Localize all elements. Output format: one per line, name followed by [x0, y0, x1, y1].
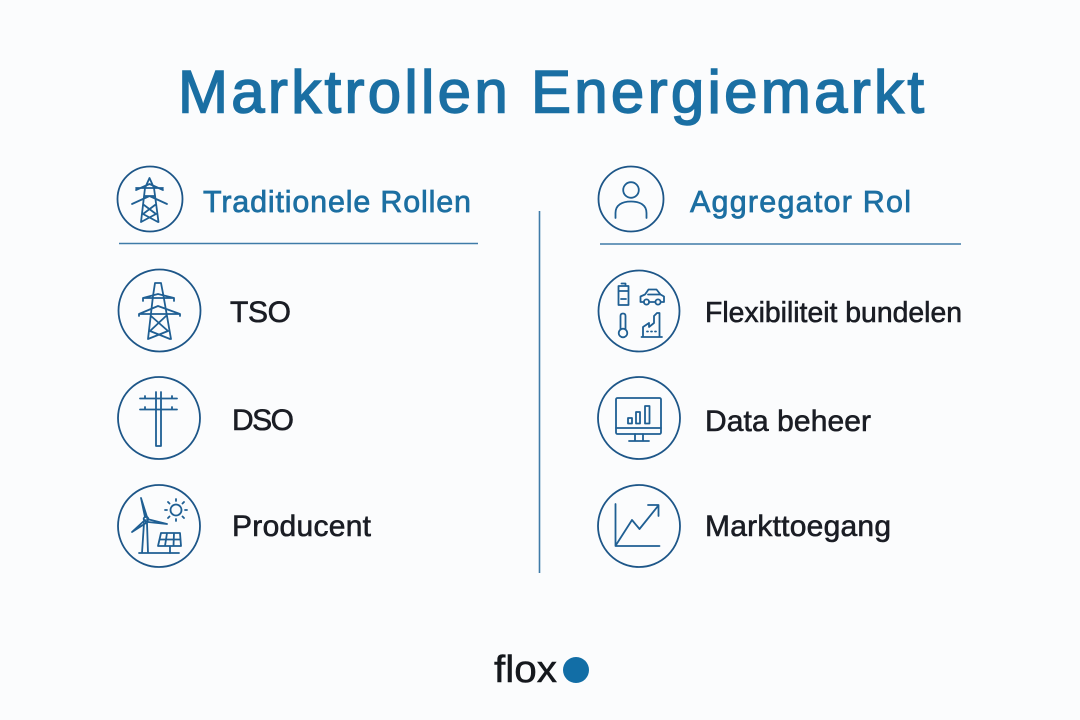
label: TSO [230, 296, 291, 329]
panel: traditionele rollen [118, 166, 478, 567]
icon: wind turbine and solar panel [118, 485, 200, 567]
label: Flexibiliteit bundelen [705, 297, 962, 329]
logo: flox: flox [494, 649, 557, 691]
label: Data beheer [705, 405, 871, 438]
label: DSO [232, 404, 294, 437]
icon: header pylon [118, 166, 182, 232]
title: Marktrollen Energiemarkt [178, 58, 924, 126]
row: Producent [118, 485, 372, 567]
icon: person [598, 166, 664, 232]
heading: aggregator rol: Aggregator Rol [690, 185, 911, 219]
logo: flox [494, 649, 589, 691]
panel: aggregator rol [598, 166, 962, 567]
label: Markttoegang [705, 510, 891, 543]
icon: utility pole [118, 377, 200, 459]
row: TSO [118, 270, 291, 352]
icon: pylon [118, 270, 200, 352]
icon: rising line chart [598, 485, 680, 567]
row: markttoegang [598, 485, 891, 567]
icon: battery, car, thermometer, factory [598, 270, 680, 352]
icon: monitor with bar chart [598, 377, 680, 459]
row: flexibiliteit bundelen [598, 270, 962, 352]
row: data beheer [598, 377, 871, 459]
heading: traditionele rollen: Traditionele Rollen [203, 185, 471, 219]
label: Producent [232, 510, 372, 543]
row: DSO [118, 377, 294, 459]
